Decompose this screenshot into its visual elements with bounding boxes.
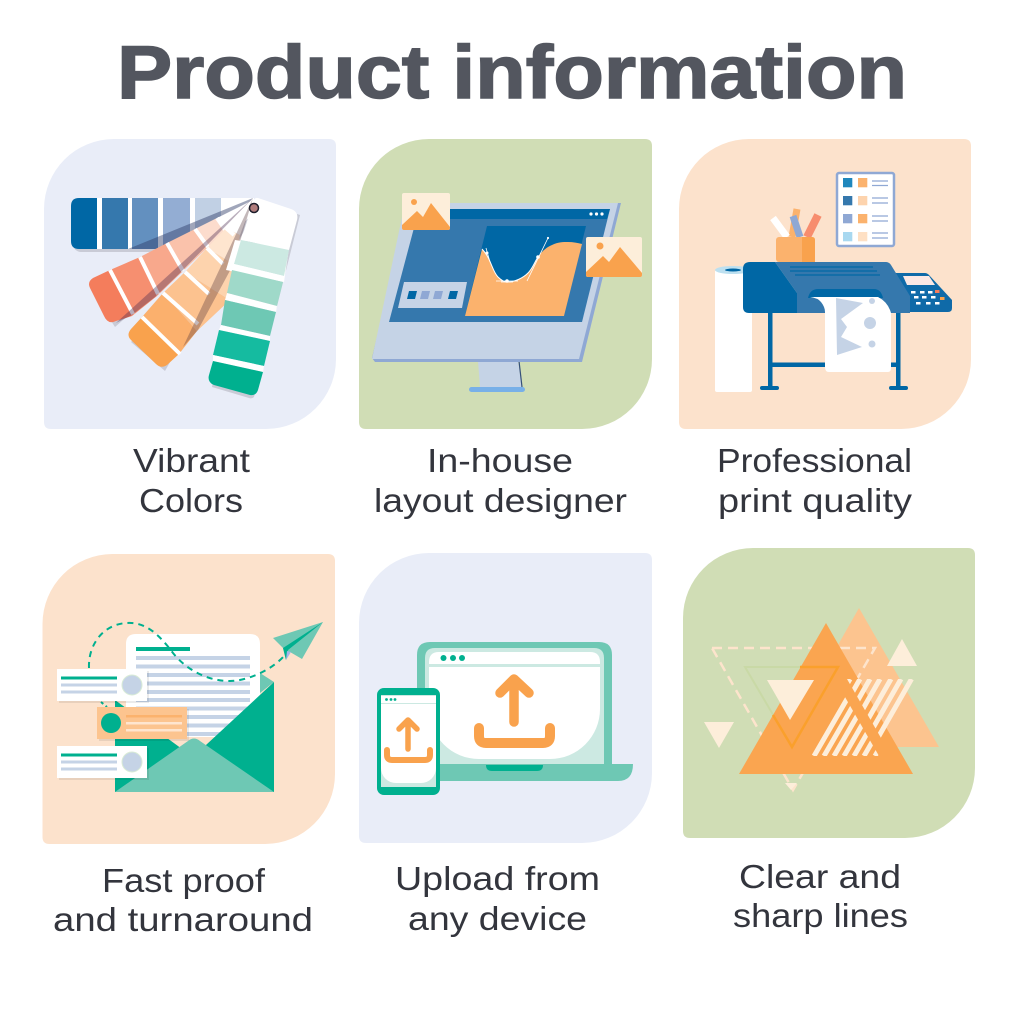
- icon: colour swatch fan: [71, 198, 300, 398]
- panel background: [42, 554, 335, 844]
- label: Upload from any device: any device: [408, 900, 587, 937]
- label: In-house layout designer: [374, 442, 627, 519]
- title: Product information: [117, 30, 907, 114]
- label: Professional print quality: [717, 442, 913, 519]
- label: Fast proof and turnaround: Fast proof: [102, 862, 266, 899]
- panel: professional print quality: [679, 139, 971, 429]
- icon: laptop and phone upload: [377, 642, 633, 795]
- label: Vibrant Colors: Vibrant: [133, 442, 250, 479]
- panel background: [359, 553, 652, 843]
- panel: fast proof and turnaround: [42, 554, 335, 844]
- panel background: [44, 139, 336, 429]
- icon: envelope with proof and paper plane: [57, 622, 323, 792]
- label: Vibrant Colors: [133, 442, 250, 519]
- label: Professional print quality: Professional: [717, 442, 912, 479]
- label: In-house layout designer: layout designer: [374, 482, 627, 519]
- panel: upload from any device: [359, 553, 652, 843]
- label: Clear and sharp lines: Clear and: [739, 858, 901, 895]
- label: Fast proof and turnaround: [53, 862, 313, 938]
- label: Fast proof and turnaround: and turnaround: [53, 901, 313, 938]
- panel: vibrant colors: [44, 139, 336, 429]
- panel background: [359, 139, 652, 429]
- label: Professional print quality: print quality: [718, 482, 913, 519]
- panel: in-house layout designer: [359, 139, 652, 429]
- label: Upload from any device: Upload from: [395, 860, 600, 897]
- panel: clear and sharp lines: [683, 548, 975, 838]
- icon: large format printer: [715, 173, 952, 392]
- panel background: [679, 139, 971, 429]
- label: Vibrant Colors: Colors: [139, 482, 243, 519]
- label: Upload from any device: [395, 860, 600, 937]
- label: Clear and sharp lines: [733, 858, 908, 934]
- panel background: [683, 548, 975, 838]
- icon: monitor with design software: [372, 193, 642, 392]
- label: In-house layout designer: In-house: [427, 442, 573, 479]
- label: Clear and sharp lines: sharp lines: [733, 897, 908, 934]
- icon: overlapping triangles: [704, 608, 939, 790]
